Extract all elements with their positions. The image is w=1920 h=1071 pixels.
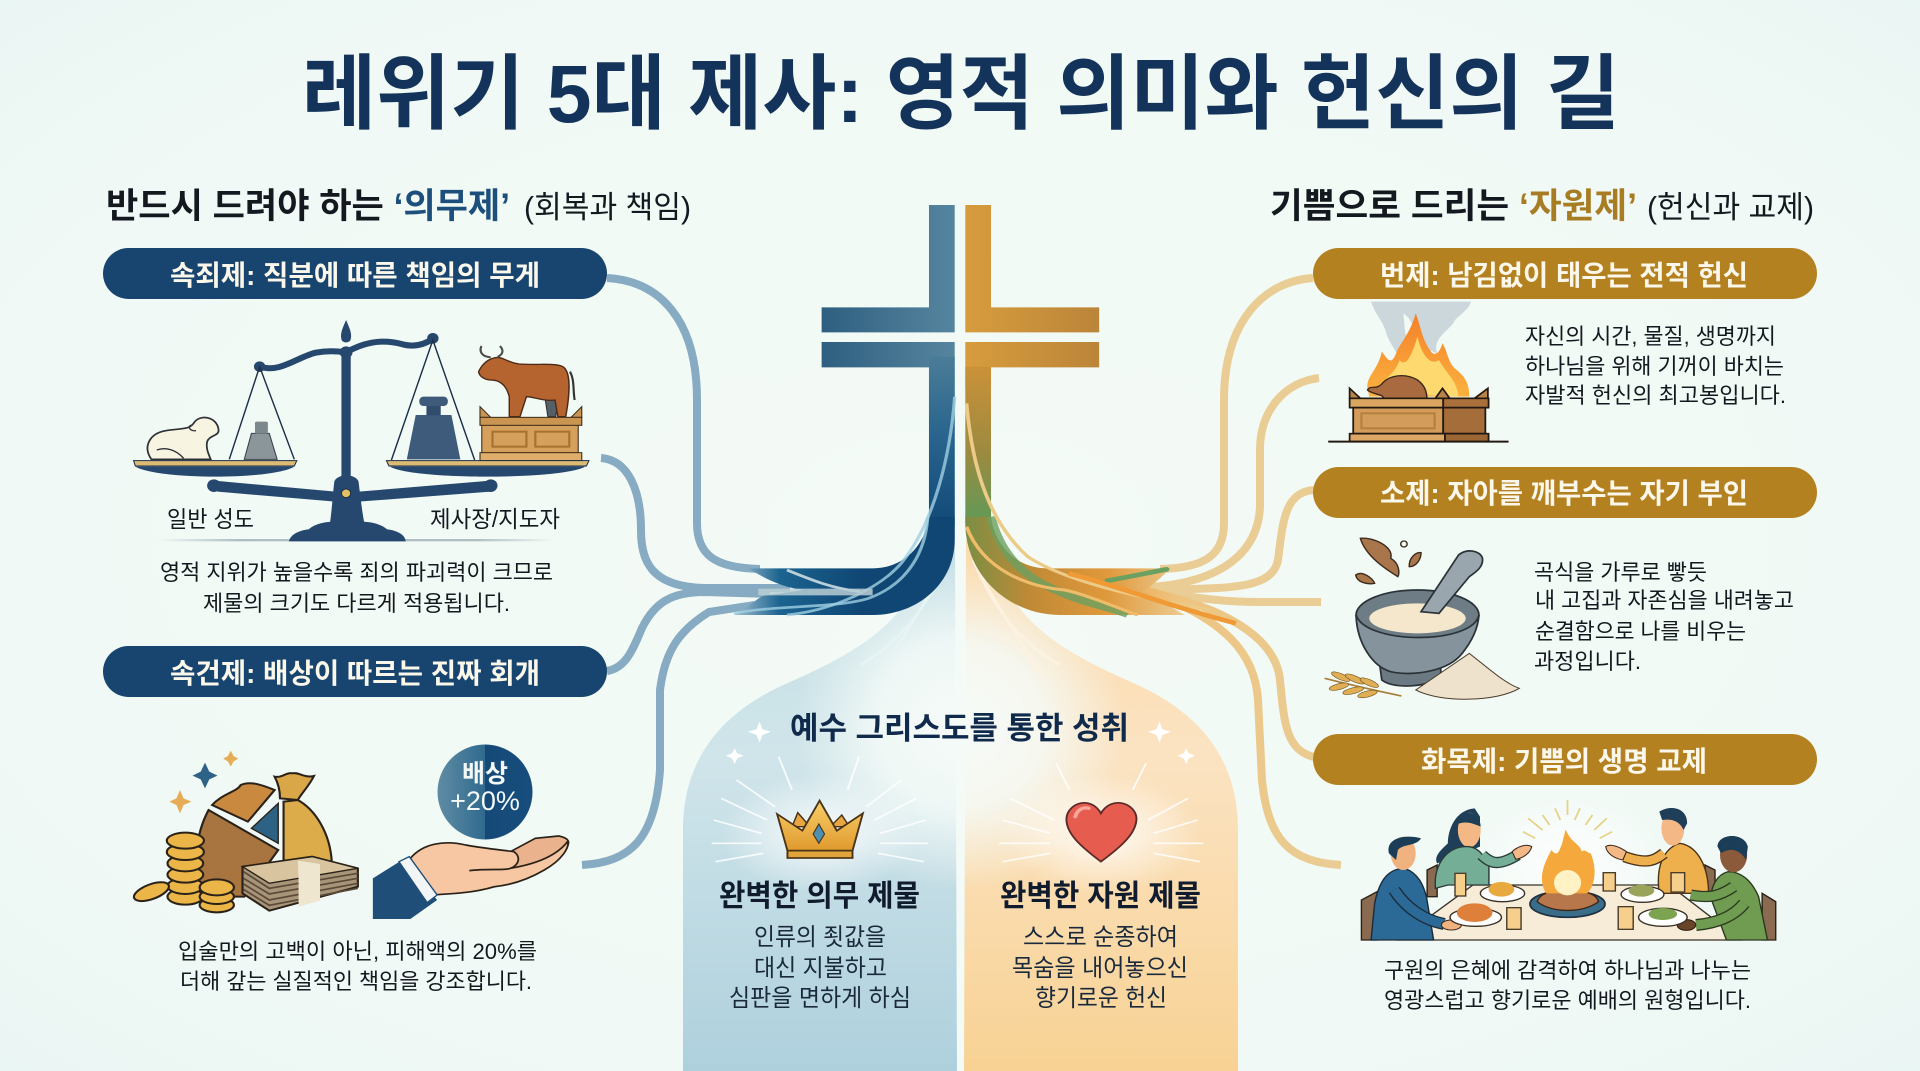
pill: burnt offering: 번제: 남김없이 태우는 전적 헌신 (1380, 260, 1748, 291)
heading: obligatory offerings (106, 187, 691, 226)
fire dish (1530, 891, 1605, 917)
flow lines: right side to the cross (1090, 278, 1341, 865)
icon: crown with rays (712, 722, 928, 893)
man in yellow (1606, 808, 1709, 893)
pill: grain offering: 소제: 자아를 깨부수는 자기 부인 (1380, 478, 1748, 509)
icon: heart with rays (999, 722, 1203, 893)
text: burnt offering description: 자발적 헌신의 최고봉입니다. (1525, 383, 1786, 408)
panel: blue fulfilment background (683, 540, 957, 1071)
sparkles (169, 751, 238, 813)
text: grain offering description: 내 고집과 자존심을 내려놓고 (1535, 588, 1794, 613)
pill: guilt offering (103, 646, 607, 697)
chairs (1361, 865, 1776, 940)
table (1398, 885, 1741, 940)
lamb (148, 418, 219, 459)
panel glow (683, 530, 1238, 900)
strands in gold panel (973, 560, 1060, 675)
flame inner (1380, 337, 1459, 397)
hand (494, 836, 569, 887)
pill: sin offering (103, 248, 607, 299)
text: sin offering description: 제물의 크기도 다르게 적용됩니다. (203, 591, 510, 616)
text: peace offering description (1384, 958, 1751, 1013)
heading: obligatory offerings: (회복과 책임) (524, 190, 691, 225)
text: perfect voluntary sacrifice: 향기로운 헌신 (1035, 985, 1167, 1012)
heading: voluntary offerings: (헌신과 교제) (1647, 190, 1814, 225)
text: burnt offering description: 자신의 시간, 물질, 생명까지 (1525, 324, 1776, 349)
title: 레위기 5대 제사: 영적 의미와 헌신의 길 (302, 49, 1620, 140)
text: burnt offering description: 하나님을 위해 기꺼이 바치는 (1525, 354, 1784, 379)
cross: gold half with streams (965, 205, 1236, 623)
text: perfect voluntary sacrifice: 스스로 순종하여 (1023, 924, 1178, 951)
icon: money bags, coins and cash (131, 751, 569, 919)
text: perfect obligatory sacrifice: 인류의 죗값을 (754, 924, 886, 951)
pans (134, 461, 297, 466)
icon: balance scale with lamb and bull (134, 320, 589, 541)
text: grain offering description: 곡식을 가루로 빻듯 (1534, 560, 1707, 585)
text: sin offering description (160, 560, 553, 616)
woman (1435, 808, 1532, 888)
cross: blue half with streams (734, 205, 955, 615)
pill: burnt offering (1313, 248, 1817, 299)
badge: restitution +20%: 배상 (462, 760, 508, 788)
text: guilt offering description: 더해 갚는 실질적인 책임을 강조합니다. (180, 969, 532, 994)
strands in blue panel (860, 560, 948, 675)
wheat (1325, 670, 1401, 699)
heading: fulfilment through Christ: 예수 그리스도를 통한 성취 (790, 711, 1129, 746)
text: peace offering description: 구원의 은혜에 감격하여 하나님과 나누는 (1384, 958, 1751, 983)
icon: fellowship meal around fire (1361, 790, 1776, 940)
man in green (1677, 836, 1767, 940)
flow lines: left side to the cross (582, 278, 790, 865)
badge: restitution +20% (438, 744, 532, 840)
text: perfect voluntary sacrifice: 완벽한 자원 제물 (1000, 880, 1201, 913)
icon: burning altar (1328, 302, 1509, 442)
panel divider (957, 530, 964, 1071)
man in blue (1371, 837, 1461, 940)
plates (1450, 885, 1687, 926)
text: sin offering description: 영적 지위가 높을수록 죄의 파괴력이 크므로 (160, 560, 553, 585)
heading: obligatory offerings: 반드시 드려야 하는 ‘의무제’ (106, 187, 510, 226)
heading: voluntary offerings (1270, 187, 1814, 226)
pill: peace offering: 화목제: 기쁨의 생명 교제 (1421, 746, 1707, 777)
flame outer (1367, 313, 1469, 397)
text: burnt offering description (1525, 324, 1786, 408)
cash stack (242, 857, 358, 911)
text: perfect voluntary sacrifice: 목숨을 내어놓으신 (1012, 955, 1188, 982)
weights (244, 433, 277, 459)
scale label: priest and leader: 제사장/지도자 (430, 506, 560, 532)
badge: restitution +20%: +20% (450, 786, 520, 816)
icon: mortar, pestle, flour and wheat (1325, 538, 1519, 699)
text: peace offering description: 영광스럽고 향기로운 예배의 원형입니다. (1384, 988, 1751, 1013)
heading: voluntary offerings: 기쁨으로 드리는 ‘자원제’ (1270, 187, 1637, 226)
text: grain offering description: 과정입니다. (1534, 649, 1641, 674)
pill: guilt offering: 속건제: 배상이 따르는 진짜 회개 (170, 658, 540, 689)
panel: gold fulfilment background (964, 540, 1238, 1071)
text: perfect voluntary sacrifice (1000, 880, 1201, 1012)
text: perfect obligatory sacrifice (719, 880, 920, 1012)
pill: peace offering (1313, 734, 1817, 785)
text: perfect obligatory sacrifice: 심판을 면하게 하심 (729, 985, 911, 1012)
pill: sin offering: 속죄제: 직분에 따른 책임의 무게 (170, 260, 540, 291)
text: guilt offering description (178, 939, 537, 994)
cups (1455, 873, 1685, 929)
text: grain offering description (1534, 560, 1794, 674)
text: perfect obligatory sacrifice: 대신 지불하고 (754, 955, 887, 982)
smoke (1371, 302, 1471, 357)
altar under bull (480, 407, 582, 417)
bull (510, 393, 559, 417)
pill: grain offering (1313, 467, 1817, 518)
text: perfect obligatory sacrifice: 완벽한 의무 제물 (719, 880, 920, 913)
scale stand (207, 320, 497, 541)
scale label: lay believers: 일반 성도 (167, 506, 254, 532)
text: grain offering description: 순결함으로 나를 비우는 (1535, 619, 1746, 644)
text: guilt offering description: 입술만의 고백이 아닌, 피해액의 20%를 (178, 939, 537, 964)
